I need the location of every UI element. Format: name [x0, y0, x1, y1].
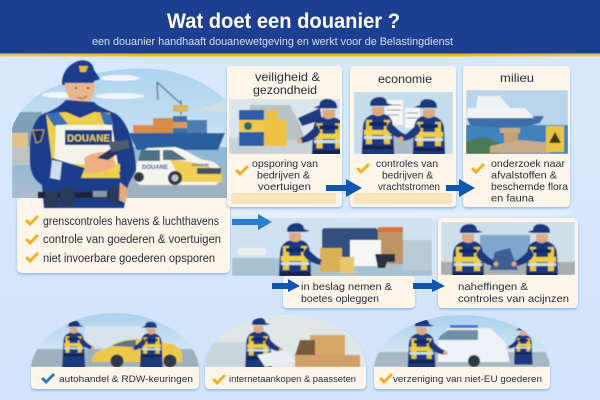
panel: milieu	[463, 66, 570, 207]
decorative band	[228, 207, 570, 221]
caption: verzeniging van niet-EU goederen	[393, 374, 542, 385]
arrow	[232, 214, 272, 230]
panel: milieu: afvalstoffen &	[491, 170, 557, 182]
gold strip	[354, 193, 452, 204]
panel: veiligheid & gezondheid	[227, 66, 347, 207]
panel: in beslag nemen	[232, 218, 432, 308]
caption card	[283, 276, 415, 308]
checklist text 3: niet invoerbare goederen opsporen	[43, 253, 215, 265]
card text: controles van	[376, 158, 438, 170]
harbour illustration: DOUANE	[192, 162, 210, 167]
harbour illustration: DOUANE	[142, 165, 168, 171]
panel: economie: vrachtstromen	[378, 181, 440, 193]
panel: autohandel	[31, 313, 199, 389]
panel: left checklist card	[17, 198, 230, 273]
illustration: hazardous drums	[229, 98, 340, 154]
panel: economie	[350, 66, 456, 207]
illustration: ship and goods	[466, 90, 568, 154]
heading: economie	[378, 72, 432, 86]
icon: check	[41, 373, 55, 384]
harbour illustration	[12, 60, 232, 200]
icon: check	[212, 374, 226, 385]
arrow	[446, 179, 475, 197]
caption: internetaankopen & paasseten	[229, 374, 356, 384]
icon: check	[25, 215, 39, 226]
icon: check	[25, 234, 39, 245]
main officer: DOUANE	[67, 132, 110, 144]
panel: milieu: en fauna	[491, 192, 534, 204]
header banner	[0, 0, 600, 56]
card text: naheffingen &	[458, 281, 528, 293]
icon: check	[25, 252, 39, 263]
card text: in beslag nemen &	[301, 281, 392, 293]
panel: verzending	[374, 315, 550, 389]
panel: veiligheid & gezondheid: voertuigen	[258, 181, 311, 193]
panel: naheffingen: controles van acijnzen	[458, 293, 569, 305]
panel: veiligheid & gezondheid: bedrijven &	[257, 170, 310, 182]
illustration: seized goods	[232, 218, 432, 276]
checklist text 2: controle van goederen & voertuigen	[43, 234, 221, 246]
card text: opsporing van	[252, 158, 318, 170]
main officer	[30, 60, 136, 208]
caption: autohandel & RDW-keuringen	[59, 374, 193, 385]
illustration: parcels	[205, 315, 366, 367]
icon: check	[356, 163, 370, 174]
card text: onderzoek naar	[491, 158, 566, 170]
panel: naheffingen	[438, 218, 578, 308]
illustration: officers checking documents	[354, 92, 453, 154]
panel: in beslag nemen: boetes opleggen	[301, 293, 379, 305]
illustration: officers with scanner	[441, 222, 575, 275]
icon: check	[379, 373, 393, 384]
heading: milieu	[500, 71, 534, 85]
arrow	[326, 179, 362, 197]
illustration: police car	[374, 315, 550, 367]
title: Wat doet een douanier ?	[167, 10, 400, 33]
panel: internetaankopen	[205, 315, 366, 389]
panel: economie: bedrijven &	[382, 170, 433, 182]
arrow	[272, 279, 300, 292]
gold strip	[231, 193, 336, 204]
heading: veiligheid &	[255, 70, 320, 84]
panel: milieu: beschernde flora	[491, 181, 568, 193]
subtitle: een douanier handhaaft douanewetgeving en werkt voor de Belastingdienst	[92, 36, 453, 48]
illustration: yellow car inspection	[31, 313, 199, 370]
icon: check	[471, 163, 485, 174]
checklist text 1: grenscontroles havens & luchthavens	[43, 216, 219, 228]
panel: veiligheid & gezondheid: gezondheid	[253, 83, 317, 97]
arrow	[413, 279, 445, 292]
icon: check	[235, 165, 249, 176]
